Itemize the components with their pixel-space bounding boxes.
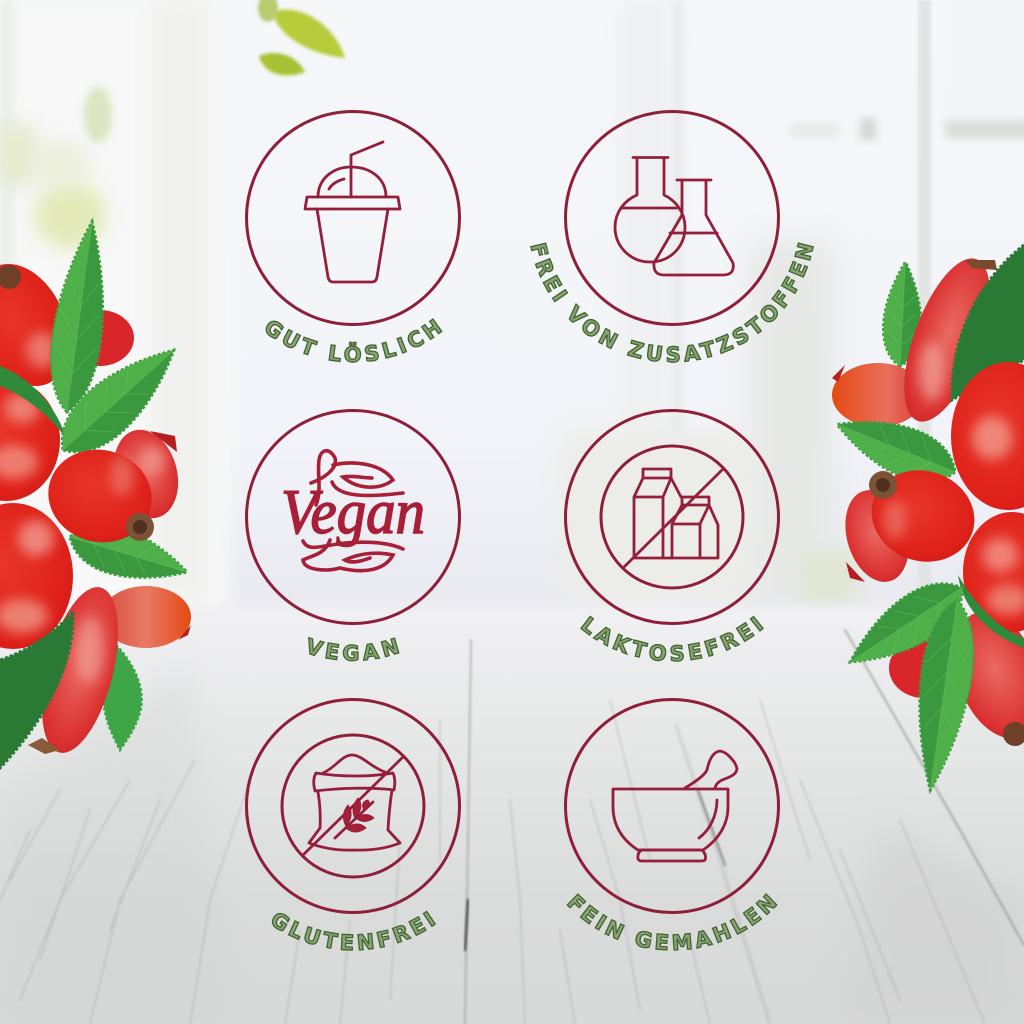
- inner circle: [601, 446, 743, 588]
- fruit: bottom right: [938, 599, 1024, 751]
- fruit: centre with stem: [38, 439, 162, 553]
- fruit: middle right: [963, 512, 1024, 632]
- badge: fein gemahlen: [564, 698, 780, 951]
- icon: milk cartons with slash: [623, 469, 722, 568]
- badge: vegan: [245, 409, 461, 662]
- fruit: middle left: [0, 379, 60, 501]
- badge: gut löslich: [245, 110, 461, 363]
- icon: flour sack with wheat and slash: [303, 755, 403, 855]
- leaf: lower left: [837, 568, 975, 682]
- label: LAKTOSEFREI: [580, 616, 764, 662]
- fruit: long lower: [27, 580, 133, 760]
- label: VEGAN: [308, 636, 400, 662]
- fruit: centre with stem: [860, 457, 986, 575]
- fruit: right small: [104, 423, 188, 525]
- fruit: orange upper left: [832, 363, 924, 427]
- label: FEIN GEMAHLEN: [566, 893, 778, 951]
- label: GUT LÖSLICH: [266, 318, 443, 363]
- leaf: lower small: [104, 645, 142, 750]
- label: GLUTENFREI: [272, 910, 436, 951]
- circle outline: [246, 112, 460, 324]
- fruit: top left: [0, 249, 87, 401]
- fruit: long top: [887, 248, 1007, 432]
- icon: flasks: [615, 158, 733, 275]
- fruit: back top: [66, 310, 134, 366]
- leaf: top left: [882, 261, 924, 367]
- badge: laktosefrei: [564, 409, 780, 662]
- circle outline: [566, 410, 778, 624]
- right rosehip cluster: [828, 245, 1024, 794]
- fruit: left small: [835, 483, 919, 589]
- leaf: top: [43, 219, 116, 415]
- leaf: dark band: [0, 366, 67, 440]
- leaf: middle right: [63, 515, 194, 594]
- fruit: lower left: [0, 503, 73, 649]
- circle outline: [246, 700, 460, 912]
- label: FREI VON ZUSATZSTOFFEN: [530, 242, 814, 363]
- icon: cup with straw: [305, 142, 400, 282]
- left rosehip cluster: [0, 219, 194, 768]
- fruit: upper right large: [951, 362, 1024, 510]
- badge: frei von zusatzstoffen: [530, 110, 814, 363]
- leaf: top right dark: [952, 245, 1024, 400]
- circle outline: [566, 700, 778, 912]
- fruit: back lower: [889, 638, 959, 698]
- leaf: lower long: [906, 597, 982, 794]
- leaf: upper right: [46, 331, 191, 469]
- inner circle: [282, 735, 424, 877]
- script word: Vegan: [281, 476, 425, 547]
- circle outline: [566, 112, 778, 324]
- circle outline: [246, 410, 460, 624]
- fruit: orange lower right: [101, 586, 191, 648]
- badge: glutenfrei: [245, 698, 461, 951]
- top and bottom leaf flourishes: [303, 451, 403, 571]
- icon: mortar and pestle: [613, 751, 737, 861]
- leaf: middle: [828, 402, 964, 494]
- leaf: dark band: [958, 575, 1024, 648]
- leaf: lower dark: [0, 612, 73, 768]
- icon: vegan lettering with leaves: [281, 451, 425, 571]
